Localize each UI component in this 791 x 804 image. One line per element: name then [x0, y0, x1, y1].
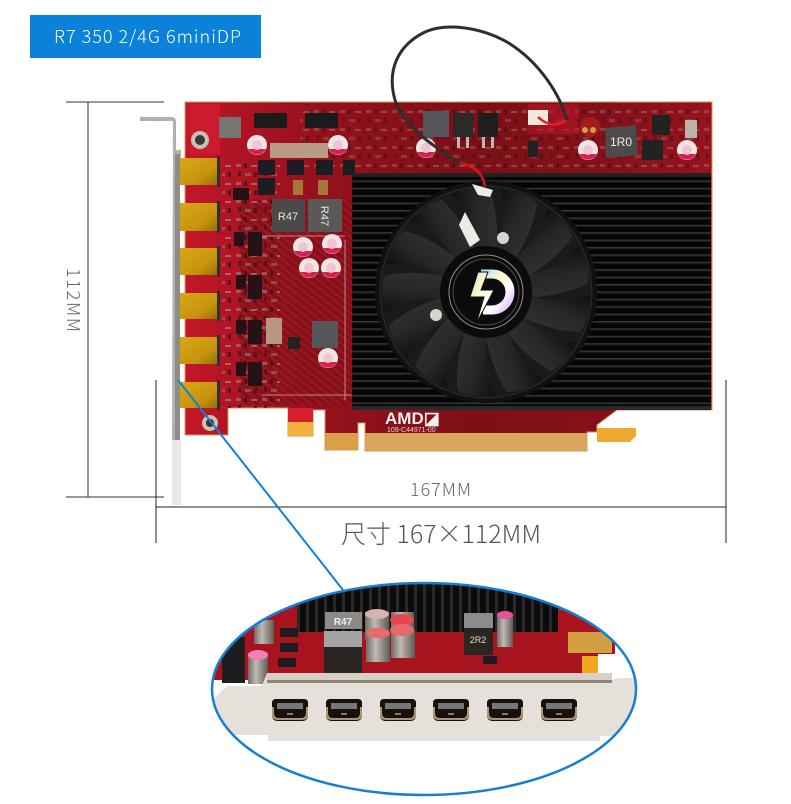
height dimension line	[66, 102, 164, 497]
close-up capacitors	[248, 609, 513, 684]
close-up chips and headers	[222, 628, 497, 683]
fan cable	[392, 27, 567, 186]
close-up 2R2 inductor	[464, 613, 493, 655]
R47 inductors	[272, 199, 342, 232]
mounting bracket	[140, 117, 181, 505]
width dimension line	[156, 380, 726, 543]
close-up R47 inductor	[324, 612, 362, 674]
close-up port 2	[326, 699, 362, 721]
close-up gold contacts	[568, 632, 612, 673]
graphics card PCB	[185, 102, 712, 451]
fan hub logo	[440, 246, 532, 338]
top-right components	[416, 110, 697, 160]
top-right components: 1R0	[610, 135, 632, 149]
AMD logo text: 109-C44971-00	[387, 427, 436, 434]
small SMD components beside ports	[233, 188, 262, 386]
close-up heatsink	[297, 580, 558, 632]
width label: 167MM	[410, 476, 471, 502]
close-up port 6	[541, 699, 577, 721]
gold contacts	[288, 422, 636, 451]
capacitors and chips	[202, 234, 342, 431]
heatsink	[352, 173, 711, 410]
size caption: 尺寸 167×112MM	[341, 515, 541, 551]
close-up port 4	[433, 699, 469, 721]
close-up port 1	[272, 699, 308, 721]
close-up PCB	[205, 583, 615, 680]
AMD logo text: AMD◪	[385, 409, 440, 428]
top-left components	[191, 113, 355, 195]
close-up bracket	[212, 673, 636, 741]
height label: 112MM	[61, 268, 87, 332]
close-up R47 inductor: R47	[334, 617, 353, 628]
mini DisplayPort connectors	[180, 156, 220, 410]
close-up port 5	[487, 699, 523, 721]
close-up port 3	[380, 699, 416, 721]
cooling fan	[375, 181, 597, 403]
close-up 2R2 inductor: 2R2	[470, 635, 486, 645]
header tag: R7 350 2/4G 6miniDP	[54, 23, 241, 49]
R47 inductors: R47	[278, 211, 298, 223]
header tag	[30, 15, 261, 58]
R47 inductors: R47	[318, 206, 330, 226]
zoom callout: port close-up	[205, 580, 636, 795]
callout leader line	[178, 380, 343, 590]
